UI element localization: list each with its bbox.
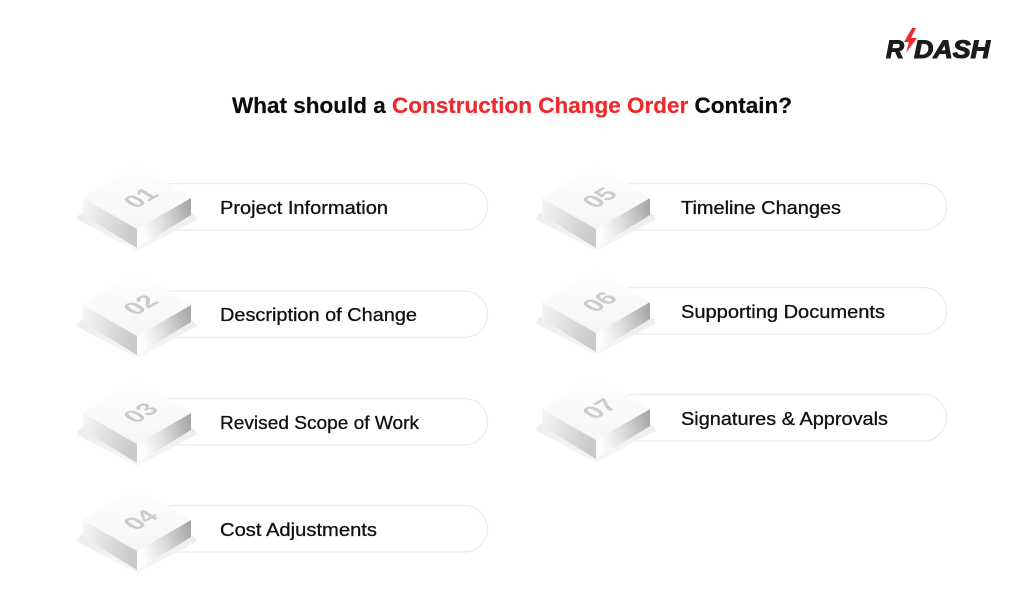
number 07: 07 bbox=[576, 395, 624, 423]
label: Revised Scope of Work bbox=[220, 412, 420, 433]
item 05: Timeline Changes bbox=[536, 165, 946, 250]
item 06: Supporting Documents bbox=[536, 269, 946, 354]
icon: red lightning bolt bbox=[904, 28, 917, 53]
number 04: 04 bbox=[117, 506, 165, 534]
item 03: Revised Scope of Work bbox=[77, 380, 487, 466]
label: Project Information bbox=[220, 197, 388, 218]
label: Signatures & Approvals bbox=[681, 408, 888, 429]
label: Description of Change bbox=[220, 304, 417, 325]
number 01: 01 bbox=[117, 184, 165, 212]
label: Timeline Changes bbox=[681, 197, 841, 218]
number 06: 06 bbox=[576, 288, 624, 316]
logo: RDASH bbox=[886, 28, 991, 64]
label: Cost Adjustments bbox=[220, 519, 377, 540]
label: Supporting Documents bbox=[681, 301, 885, 322]
item 04: Cost Adjustments bbox=[77, 487, 487, 572]
item 02: Description of Change bbox=[77, 272, 487, 358]
logo: RDASH: DASH bbox=[914, 36, 991, 64]
logo: RDASH: R bbox=[886, 36, 904, 64]
number 02: 02 bbox=[117, 291, 165, 319]
item 01: Project Information bbox=[77, 165, 487, 250]
number 05: 05 bbox=[576, 184, 624, 212]
item 07: Signatures & Approvals bbox=[536, 376, 946, 462]
number 03: 03 bbox=[117, 399, 165, 427]
title: What should a Construction Change Order Contain? bbox=[232, 93, 792, 118]
